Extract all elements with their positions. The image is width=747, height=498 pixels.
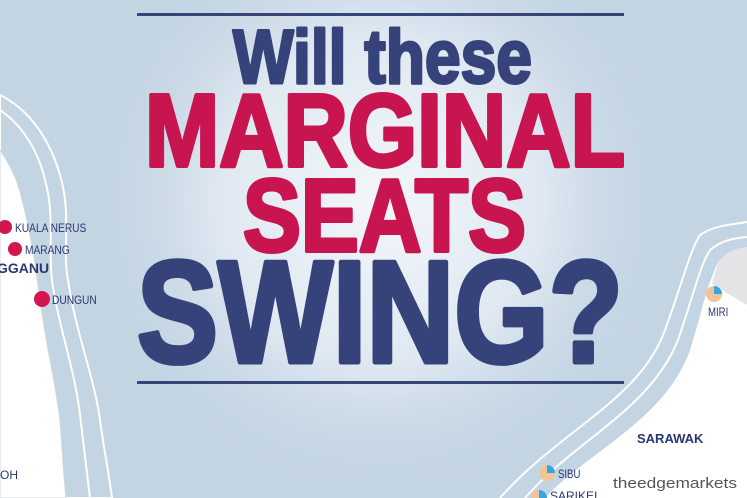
title: SEATS xyxy=(243,158,526,273)
labels: peninsula seats: DUNGUN xyxy=(52,294,97,307)
top rule xyxy=(137,13,624,16)
labels: sarawak seats xyxy=(531,286,728,498)
labels: sarawak seats: SARAWAK xyxy=(637,431,704,446)
labels: peninsula seats: MARANG xyxy=(25,244,70,257)
labels: sarawak seats: MIRI xyxy=(708,306,728,319)
title: MARGINAL xyxy=(145,73,625,188)
labels: peninsula seats xyxy=(0,220,97,482)
labels: peninsula seats: KUALA NERUS xyxy=(15,222,86,235)
bottom rule xyxy=(137,381,624,384)
map: borneo coast xyxy=(500,222,747,498)
title: SWING? xyxy=(137,231,623,393)
labels: sarawak seats: SIBU xyxy=(558,468,580,481)
map: peninsula coast xyxy=(0,95,112,498)
labels: peninsula seats: OH xyxy=(0,468,18,482)
watermark: theedgemarkets xyxy=(613,475,737,492)
title xyxy=(137,15,625,393)
title: Will these xyxy=(233,15,532,100)
